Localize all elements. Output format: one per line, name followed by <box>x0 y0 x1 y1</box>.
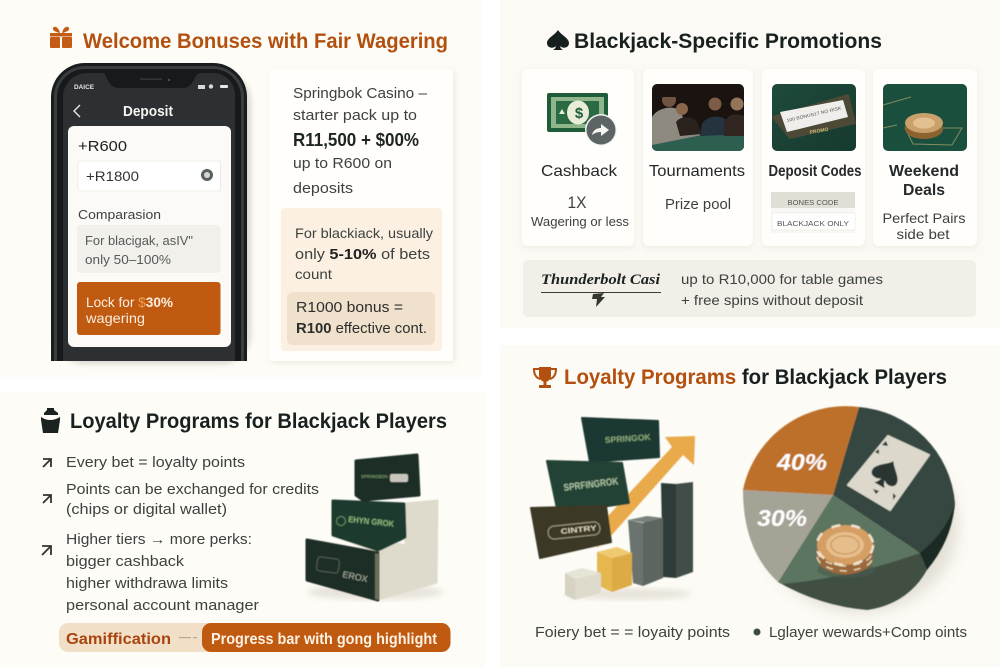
deposit form card: Comparasion <box>78 207 161 222</box>
illustration: stacked tier blocks <box>307 455 443 600</box>
illustration: rising bars and arrow <box>531 418 695 600</box>
card: cashback <box>522 69 634 248</box>
card: weekend deals: side bet <box>896 226 950 242</box>
panel: blackjack promotions <box>500 0 1000 328</box>
bullet: tiers <box>42 532 259 614</box>
back chevron <box>74 105 80 117</box>
phone mockup <box>51 63 251 364</box>
loyalty card: middle <box>547 461 629 513</box>
bar: yellow <box>597 547 632 592</box>
banner: thunderbolt casino <box>523 260 976 317</box>
blackjack contribution callout: count <box>295 266 332 282</box>
bullet: tiers: Higher tiers → more perks: <box>66 532 252 548</box>
icon: banknote with arrow: $ <box>575 105 584 122</box>
slice: dark <box>833 407 955 570</box>
heading: welcome bonuses: Welcome Bonuses with Fair Wagering <box>83 30 448 53</box>
icon: lightning bolt <box>592 293 605 307</box>
slice: grey 30%: 30% <box>757 505 807 531</box>
comparison note: only 50–100% <box>85 253 171 267</box>
effective contribution note <box>287 292 435 345</box>
icon: top hat stack <box>41 408 60 433</box>
arrow <box>597 436 695 548</box>
icon: trophy <box>534 367 556 388</box>
photo: chip on felt <box>883 84 967 151</box>
bullet: exchange: (chips or digital wallet) <box>66 502 227 518</box>
loyalty card: middle: SPRFINGROK <box>563 476 620 494</box>
slice: green <box>778 495 920 584</box>
photo: players at a table <box>652 84 744 151</box>
card: tournaments: Tournaments <box>649 163 745 180</box>
bullet: points: Every bet = loyalty points <box>66 455 245 471</box>
loyalty card: top: SPRINGOK <box>604 432 652 445</box>
photo: code plaque: 100 BONUS17 NO RISK <box>786 106 842 123</box>
lock button: wagering <box>85 310 145 326</box>
caption: legend: Lglayer wewards+Comp oints <box>769 625 967 641</box>
card: weekend deals: Weekend <box>889 163 959 180</box>
slice: orange 40% <box>743 406 859 495</box>
card: cashback: 1X <box>568 193 586 212</box>
offer card: springbok casino: deposits <box>293 180 353 197</box>
slice: grey 30% <box>743 490 833 582</box>
offer card: springbok casino: up to R600 on <box>293 155 392 172</box>
code tags: BLACKJACK ONLY <box>777 219 849 228</box>
photo: code plaque: PROMO <box>809 127 829 136</box>
card: cashback: Wagering or less <box>531 215 629 229</box>
icon: banknote with arrow <box>547 93 617 146</box>
panel: loyalty charts <box>500 345 1000 667</box>
amount input: +R1800 <box>86 168 139 184</box>
amount input <box>78 161 220 191</box>
illustration: stacked tier blocks: EROX <box>342 569 369 584</box>
comparison note <box>77 225 220 273</box>
bullet: exchange: Points can be exchanged for credits <box>66 482 319 498</box>
illustration: stacked tier blocks: SPRINGBOK <box>361 474 388 479</box>
panel: loyalty list <box>0 392 485 667</box>
banner: thunderbolt casino: up to R10,000 for table games <box>681 271 883 287</box>
loyalty card: top <box>582 418 659 462</box>
offer card: springbok casino: R11,500 + $00% <box>293 130 419 150</box>
illustration: stacked tier blocks: EHYN GROK <box>348 514 395 529</box>
bullet: tiers: personal account manager <box>66 598 259 614</box>
card: deposit codes: Deposit Codes <box>768 163 862 180</box>
offer card: springbok casino <box>269 69 455 363</box>
bar: grey <box>628 516 663 586</box>
deposit form card <box>68 126 231 347</box>
heading: loyalty list: Loyalty Programs for Blackjack Players <box>70 410 447 433</box>
icon: gift <box>50 27 72 48</box>
playing card: ace of spades <box>848 436 929 510</box>
card: deposit codes <box>762 69 865 248</box>
card: cashback: Cashback <box>541 163 618 180</box>
caption: points: Foiery bet = = loyaity points <box>535 625 730 641</box>
blackjack contribution callout: For blackiack, usually <box>295 225 433 241</box>
card: tournaments <box>643 69 753 248</box>
code tags <box>771 192 855 233</box>
bullet: tiers: higher withdrawa limits <box>66 576 228 592</box>
lock button <box>77 282 220 335</box>
pie chart <box>743 406 958 613</box>
gamification bar <box>59 623 450 652</box>
icon: spade <box>547 30 569 50</box>
lock button: Lock for $30% <box>86 294 174 310</box>
card: weekend deals: Perfect Pairs <box>882 210 966 226</box>
offer card: springbok casino: starter pack up to <box>293 107 417 124</box>
card: tournaments: Prize pool <box>665 197 731 213</box>
effective contribution note: R1000 bonus = <box>296 300 403 316</box>
heading: blackjack promotions: Blackjack-Specific Promotions <box>574 30 882 53</box>
progress bar <box>202 623 450 652</box>
card: weekend deals <box>873 69 977 248</box>
bullet: exchange <box>43 482 319 518</box>
loyalty card: bottom: CINTRY <box>560 523 597 536</box>
loyalty card: bottom <box>531 506 611 558</box>
comparison note: For blacigak, asIV" <box>85 234 193 248</box>
effective contribution note: R100 effective cont. <box>296 321 427 337</box>
gamification bar: Gamiffication <box>66 631 171 648</box>
pie side wall <box>778 550 927 610</box>
photo: code plaque <box>772 84 856 151</box>
banner: thunderbolt casino: + free spins without deposit <box>681 292 863 308</box>
bar: dark <box>661 482 693 578</box>
status bar: DAICE <box>74 84 95 91</box>
deposit form card: +R600 <box>78 138 127 155</box>
blackjack contribution callout: only 5-10% of bets <box>295 247 430 263</box>
heading: loyalty charts: Loyalty Programs for Blackjack Players <box>564 366 947 389</box>
offer card: springbok casino: Springbok Casino – <box>293 85 428 102</box>
banner: thunderbolt casino: Thunderbolt Casi <box>541 272 661 288</box>
poker chips <box>817 525 875 578</box>
code tags: BONES CODE <box>788 198 838 207</box>
bullet: tiers: bigger cashback <box>66 554 185 570</box>
progress bar: Progress bar with gong highlight <box>211 631 438 648</box>
screen title: Deposit <box>123 103 173 120</box>
status bar <box>74 84 228 91</box>
bar: small cream <box>565 568 601 600</box>
card: weekend deals: Deals <box>903 182 945 199</box>
slice: orange 40%: 40% <box>776 449 827 475</box>
blackjack contribution callout <box>281 208 442 351</box>
legend dot <box>754 628 760 636</box>
